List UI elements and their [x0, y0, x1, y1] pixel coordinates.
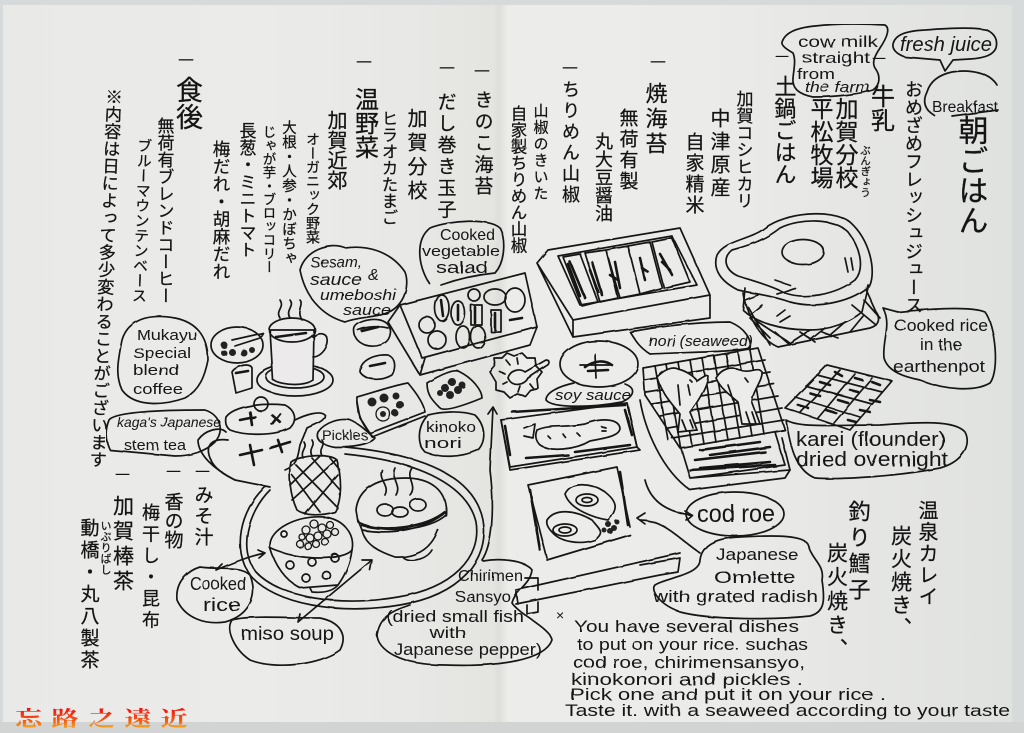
- Japanese menu text: miso soup, pickles, tea: 一: [115, 467, 130, 484]
- pickles cup: [290, 440, 341, 515]
- callout: cooked rice in the earthen pot: earthenpot: [893, 357, 985, 376]
- callout: kaga's Japanese stem tea: stem tea: [124, 437, 187, 454]
- callout: breakfast: Breakfast: [932, 99, 999, 116]
- Japanese menu text: miso soup, pickles, tea: 香の物: [162, 492, 183, 549]
- Japanese menu text: breakfast and drinks: 加賀分校: [832, 97, 858, 189]
- callout: pickles: [317, 420, 375, 447]
- callout: pickles: Pickles: [322, 427, 368, 443]
- soy sauce dish: [560, 341, 638, 387]
- callout: Mukayu special blend coffee: blend: [133, 362, 179, 379]
- pickles dish: [357, 383, 425, 437]
- Japanese menu text: rice: 加賀コシヒカリ: [734, 90, 753, 209]
- callout: kinoko nori: kinoko: [426, 419, 476, 436]
- Japanese menu text: kinoko nori, omelette, vegetables: 温野菜: [350, 87, 378, 159]
- Japanese menu text: grilled flounder and cod roe: 炭火焼き、: [824, 542, 848, 662]
- callout: chirimen sansyo: with: [429, 625, 466, 642]
- coffee cup and saucer: [257, 300, 333, 396]
- Japanese menu text: after the meal and note: 食後: [172, 76, 202, 130]
- Japanese menu text: grilled flounder and cod roe: 炭火焼き、: [888, 525, 912, 640]
- omelette plate: [528, 467, 630, 560]
- callout: karei flounder: dried overnight: [796, 449, 949, 471]
- earthen pot with rice: [716, 214, 880, 347]
- flower dish and spoon: [490, 353, 549, 398]
- Japanese menu text: kinoko nori, omelette, vegetables: 梅だれ・胡麻だれ: [211, 140, 231, 280]
- Japanese menu text: after the meal and note: [86, 53, 202, 468]
- watermark: 忘路之遠近: [15, 708, 197, 731]
- callout: Mukayu special blend coffee: Special: [133, 345, 191, 362]
- big tray: [240, 447, 484, 609]
- Japanese menu text: kinoko nori, omelette, vegetables: 一: [439, 61, 455, 78]
- callout: kaga's Japanese stem tea: kaga's Japanese: [117, 414, 221, 430]
- salad plate: [388, 273, 537, 375]
- miso soup bowl: [356, 468, 446, 560]
- callout: cow milk: cow milk: [798, 34, 879, 51]
- Japanese menu text: kinoko nori, omelette, vegetables: だし巻き玉子: [434, 92, 456, 221]
- Japanese menu text: seaweed and chirimen: 無荷有製: [616, 108, 638, 192]
- callout: cooked rice in the earthen pot: in the: [920, 335, 962, 354]
- callout: soy sauce: [546, 383, 633, 406]
- callout: cooked rice in the earthen pot: [883, 308, 995, 389]
- callout: cooked vegetable salad: vegetable: [422, 243, 500, 260]
- Japanese menu text: breakfast and drinks: 牛乳: [866, 84, 894, 132]
- callout: cow milk: the farm: [805, 79, 870, 96]
- Japanese menu text: kinoko nori, omelette, vegetables: [211, 55, 493, 280]
- callout: sesame and umeboshi sauce: &: [368, 267, 379, 284]
- Japanese menu text: miso soup, pickles, tea: 一: [195, 464, 210, 481]
- callout: cow milk: straight: [802, 50, 871, 67]
- Japanese menu text: seaweed and chirimen: 焼海苔: [642, 82, 668, 157]
- Japanese menu text: kinoko nori, omelette, vegetables: 一: [356, 55, 372, 72]
- callout: Japanese omelette with grated radish: [652, 536, 824, 619]
- callout: cow milk: from: [797, 66, 835, 83]
- Japanese menu text: breakfast and drinks: ぶんぎょう: [859, 145, 871, 198]
- note in English: You have several dishes: [574, 617, 799, 636]
- callout: Japanese omelette with grated radish: Japanese: [716, 545, 798, 564]
- callout: Japanese omelette with grated radish: with grated radish: [652, 587, 818, 606]
- note in English: ×: [556, 607, 564, 623]
- Japanese menu text: rice: 土鍋ごはん: [772, 75, 796, 185]
- Japanese menu text: breakfast and drinks: おめざめフレッシュジュース: [903, 80, 923, 314]
- callout: breakfast: [925, 71, 999, 116]
- callout: Mukayu special blend coffee: [118, 316, 208, 403]
- callout: cod roe with arrow: cod roe: [697, 500, 775, 528]
- callout: chirimen sansyo: Japanese pepper): [394, 640, 542, 659]
- callout: chirimen sansyo: (dried small fish: [386, 607, 524, 626]
- sauce bowls: [354, 319, 395, 379]
- flounder on grill: [640, 348, 790, 490]
- callout: sesame and umeboshi sauce: sauce: [310, 270, 362, 289]
- Japanese menu text: kinoko nori, omelette, vegetables: きのこ海苔: [472, 90, 493, 198]
- callout: sesame and umeboshi sauce: Sesam,: [310, 254, 362, 271]
- Japanese menu text: after the meal and note: 一: [178, 53, 194, 70]
- callout: fresh juice: fresh juice: [900, 34, 992, 56]
- Japanese menu text: breakfast and drinks: 一: [872, 51, 886, 67]
- Japanese menu text: after the meal and note: 無荷有ブレンドコーヒー: [154, 117, 174, 304]
- Japanese menu text: miso soup, pickles, tea: 動橋・丸八製茶: [78, 518, 99, 672]
- Japanese menu text: seaweed and chirimen: ちりめん山椒: [560, 80, 580, 206]
- Japanese menu text: grilled flounder and cod roe: [824, 500, 938, 662]
- Japanese menu text: kinoko nori, omelette, vegetables: 大根・人参・かぼちゃ: [280, 120, 296, 265]
- Japanese menu text: kinoko nori, omelette, vegetables: じゃが芋・ブロッコリー: [260, 125, 276, 274]
- callout: karei flounder: [786, 420, 967, 479]
- sweets plate and small cup: [211, 327, 263, 393]
- arrow to omelette: [516, 513, 700, 614]
- Japanese menu text: seaweed and chirimen: 丸大豆醤油: [593, 132, 613, 222]
- callout: chirimen sansyo: Sansyo: [455, 589, 511, 606]
- callout: nori seaweed: nori (seaweed): [649, 333, 753, 350]
- Japanese menu text: miso soup, pickles, tea: [78, 464, 213, 672]
- callout: karei flounder: karei (flounder): [796, 429, 946, 451]
- Japanese menu text: breakfast and drinks: 平松牧場: [807, 97, 834, 189]
- Japanese menu text: after the meal and note: ※内容は日によって多少変わることがございます: [86, 88, 123, 468]
- callout: chirimen sansyo: Chirimen: [458, 568, 523, 585]
- arrow from chirimen to kinoko area: [482, 407, 497, 560]
- note in English: to put on your rice. suchas: [577, 635, 808, 654]
- note in English: kinokonori and pickles .: [571, 670, 803, 689]
- callout: chirimen sansyo: [377, 560, 552, 665]
- Japanese menu text: rice: 中津原産: [707, 108, 730, 200]
- Japanese menu text: kinoko nori, omelette, vegetables: ヒラオカたまご: [379, 110, 397, 226]
- Japanese menu text: miso soup, pickles, tea: 梅干し・昆布: [140, 503, 160, 632]
- callout: fresh juice: [893, 28, 997, 71]
- Japanese menu text: rice: 自家精米: [682, 132, 704, 216]
- callout: cod roe with arrow: [645, 480, 784, 536]
- teapot: [198, 397, 325, 487]
- Japanese menu text: rice: 一: [775, 49, 789, 65]
- rice bowl: [270, 517, 353, 592]
- Japanese menu text: kinoko nori, omelette, vegetables: 加賀分校: [404, 108, 427, 204]
- callout: miso soup: [230, 560, 372, 665]
- Japanese menu text: rice: [682, 49, 796, 216]
- callout: kaga's Japanese stem tea: [106, 410, 221, 456]
- note in English: Pick one and put it on your rice .: [570, 685, 886, 704]
- Japanese menu text: kinoko nori, omelette, vegetables: 一: [474, 64, 490, 81]
- callout: cooked rice in the earthen pot: Cooked rice: [894, 316, 988, 335]
- callout: sesame and umeboshi sauce: [300, 246, 407, 322]
- Japanese menu text: seaweed and chirimen: 一: [650, 55, 666, 72]
- Japanese menu text: seaweed and chirimen: [508, 55, 668, 255]
- callout: cooked vegetable salad: [420, 221, 504, 285]
- kinoko nori dish: [427, 371, 482, 409]
- note in English: cod roe, chirimensansyo,: [573, 653, 805, 672]
- callout: miso soup: miso soup: [241, 624, 334, 645]
- callout: cooked rice: Cooked: [190, 574, 246, 594]
- callout: Mukayu special blend coffee: Mukayu: [137, 327, 197, 344]
- Japanese menu text: grilled flounder and cod roe: 温泉カレイ: [915, 500, 938, 608]
- callout: kinoko nori: [419, 412, 484, 456]
- callout: cooked vegetable salad: Cooked: [440, 227, 495, 244]
- Japanese menu text: seaweed and chirimen: 一: [562, 61, 578, 78]
- callout: soy sauce: soy sauce: [555, 387, 631, 404]
- callout: nori seaweed: [630, 322, 753, 354]
- callout: Mukayu special blend coffee: coffee: [133, 381, 183, 398]
- Japanese menu text: kinoko nori, omelette, vegetables: オーガニック野菜: [305, 132, 321, 244]
- callout: cow milk: [782, 24, 888, 97]
- Japanese menu text: after the meal and note: ブルーマウンテンベース: [130, 138, 152, 303]
- Japanese menu text: seaweed and chirimen: 自家製ちりめん山椒: [508, 105, 527, 255]
- callout: cooked vegetable salad: salad: [436, 258, 488, 277]
- cod roe dish on plate: [501, 403, 640, 470]
- note in English: [556, 607, 1010, 720]
- callout: Japanese omelette with grated radish: Omlette: [714, 568, 796, 587]
- Japanese menu text: miso soup, pickles, tea: いぶりばし: [99, 520, 112, 575]
- Japanese menu text: grilled flounder and cod roe: 釣り鱈子: [846, 500, 870, 604]
- Japanese menu text: kinoko nori, omelette, vegetables: 長葱・ミニトマト: [236, 122, 256, 258]
- nori box: [537, 228, 710, 337]
- Japanese menu text: miso soup, pickles, tea: 加賀棒茶: [110, 495, 134, 595]
- callout: kinoko nori: nori: [424, 435, 462, 452]
- note in English: Taste it. with a seaweed according to your taste: [565, 701, 1010, 720]
- Japanese menu text: breakfast and drinks: 朝ごはん: [954, 115, 988, 235]
- checkered grill mat: [785, 365, 892, 430]
- callout: sesame and umeboshi sauce: sauce: [343, 302, 391, 319]
- callout: cooked rice: [177, 550, 265, 623]
- callout: cooked rice: rice: [203, 595, 241, 615]
- Japanese menu text: seaweed and chirimen: 山椒のきいた: [532, 103, 548, 202]
- Japanese menu text: miso soup, pickles, tea: 一: [166, 464, 181, 481]
- callout: sesame and umeboshi sauce: umeboshi: [320, 287, 397, 304]
- Japanese menu text: miso soup, pickles, tea: みそ汁: [192, 485, 213, 548]
- Japanese menu text: kinoko nori, omelette, vegetables: 加賀近郊: [324, 110, 347, 190]
- Japanese menu text: breakfast and drinks: [807, 51, 988, 314]
